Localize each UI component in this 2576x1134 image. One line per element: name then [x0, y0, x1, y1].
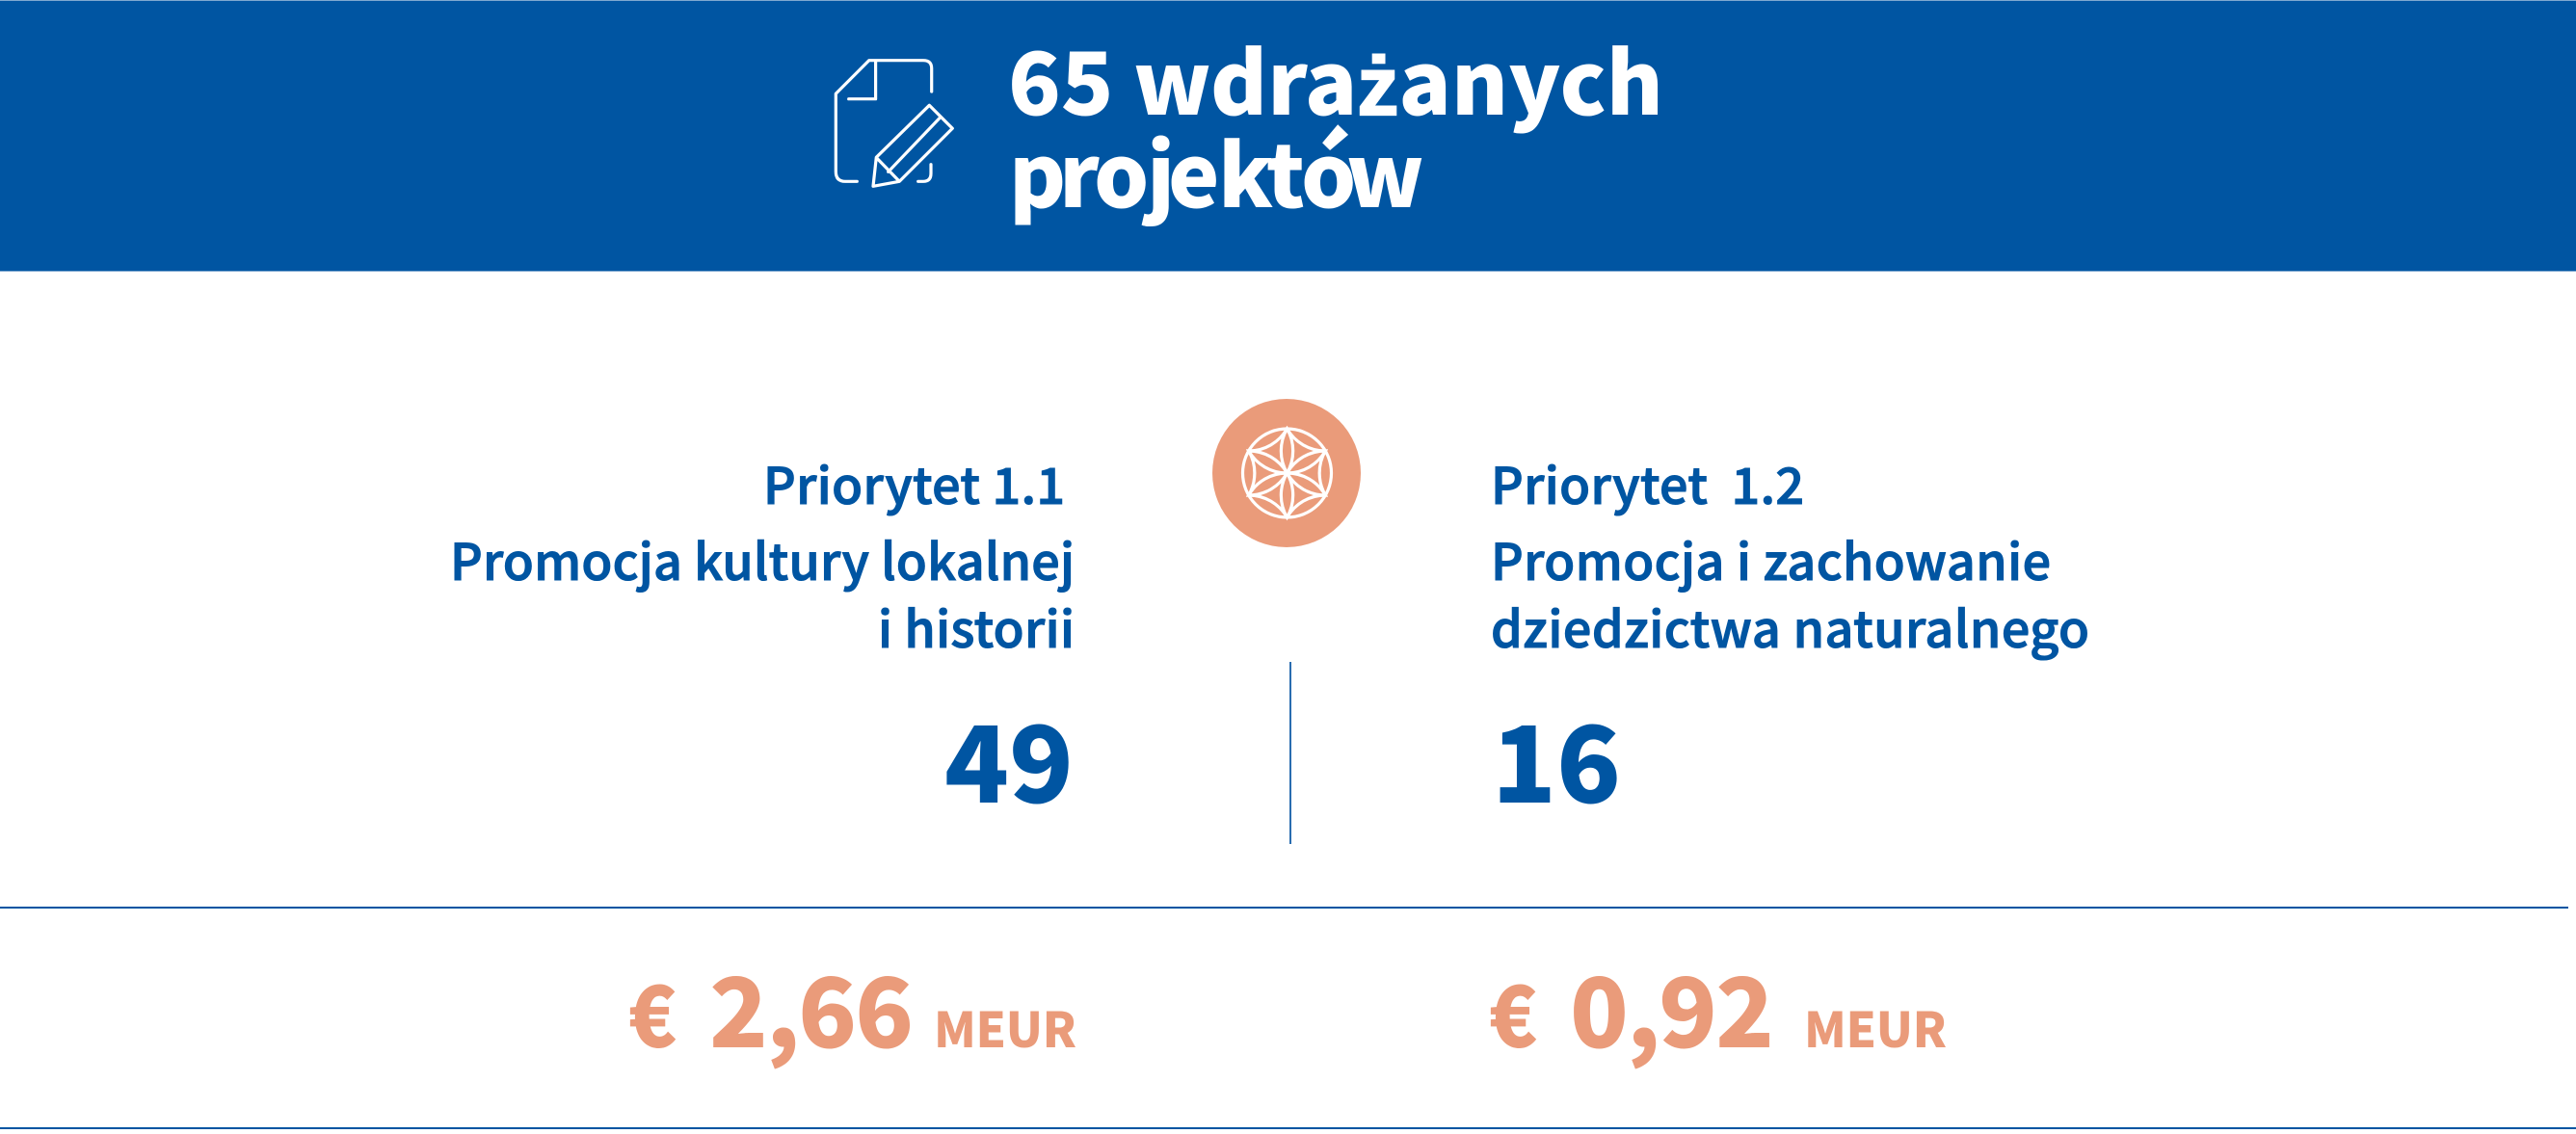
amount: 2,66 MEUR: €: [628, 950, 677, 1072]
title: 65 wdrażanych: [1008, 14, 1663, 140]
text: priority 1.2 name: dziedzictwa naturalnego: [1491, 590, 2089, 662]
number: 49 projects: 49: [944, 679, 1074, 833]
header band: [0, 0, 2576, 272]
divider: [1289, 662, 1291, 844]
amount: 0,92 MEUR: €: [1489, 950, 1537, 1072]
number: 16 projects: 16: [1492, 679, 1621, 833]
amount: 2,66 MEUR: 2,66: [709, 936, 914, 1075]
title: [1008, 14, 1663, 232]
rule below amounts: [0, 1127, 2576, 1129]
panel: priority 1.1: [450, 446, 1075, 833]
amount: 0,92 MEUR: MEUR: [1804, 992, 1947, 1062]
amount: 0,92 MEUR: 0,92: [1570, 936, 1774, 1075]
text: priority 1.1 name: Promocja kultury lokalnej: [450, 522, 1075, 594]
icon: rosette badge: [1212, 399, 1361, 547]
text: priority 1.2 name: Promocja i zachowanie: [1491, 522, 2051, 594]
icon: document with pencil: [836, 61, 952, 186]
rule above amounts: [0, 907, 2568, 909]
panel: priority 1.2: [1491, 446, 2089, 833]
text: priority 1.1 name: [450, 522, 1075, 662]
amount: 2,66 MEUR: MEUR: [934, 992, 1076, 1062]
text: priority 1.2 name: [1491, 522, 2089, 662]
amount: 2,66 MEUR: [628, 936, 1076, 1075]
amount: 0,92 MEUR: [1489, 936, 1947, 1075]
heading: priority 1.1: Priorytet 1.1: [763, 446, 1065, 518]
heading: priority 1.2: Priorytet 1.2: [1491, 446, 1804, 518]
title: projektów: [1009, 107, 1424, 232]
text: priority 1.1 name: i historii: [878, 590, 1075, 662]
